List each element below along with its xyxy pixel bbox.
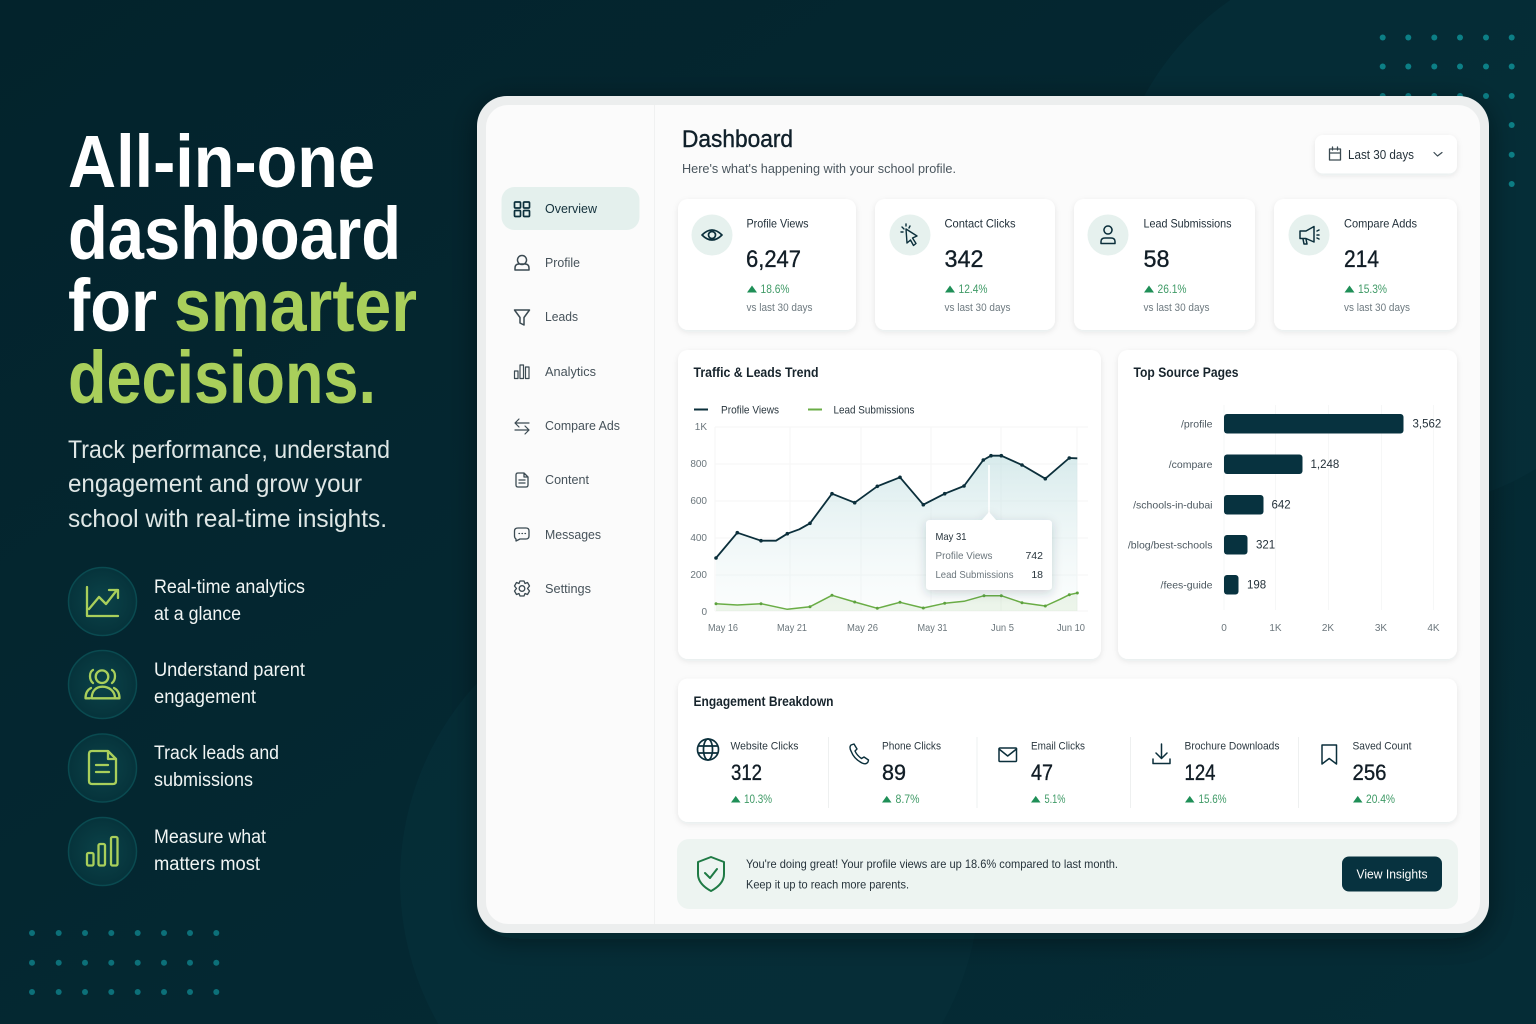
legend: Lead Submissions — [834, 404, 915, 416]
card: lead submissions: 26.1% — [1158, 284, 1186, 296]
card: compare adds: 214 — [1344, 246, 1379, 273]
bar: blog best schools — [1128, 535, 1275, 554]
feature: parent engagement: engagement — [154, 687, 257, 708]
y axis labels: 400 — [690, 533, 707, 544]
panel: top source pages: Top Source Pages — [1134, 365, 1238, 380]
nav: leads: Leads — [545, 309, 578, 324]
metric: website clicks: 10.3% — [744, 794, 772, 806]
metric: email clicks: Email Clicks — [1031, 740, 1085, 752]
card: contact clicks: Contact Clicks — [944, 216, 1016, 230]
metric: brochure downloads: 15.6% — [1198, 794, 1226, 806]
metric: website clicks: 312 — [731, 760, 762, 785]
icon: cursor click — [901, 224, 917, 246]
feature: parent engagement: Understand parent — [154, 660, 306, 681]
subtitle: Track performance, understand — [68, 436, 390, 464]
x axis labels: May 16 — [708, 623, 738, 634]
bar: blog best schools: 321 — [1256, 540, 1275, 552]
nav: compare ads: Compare Ads — [545, 418, 620, 433]
subtitle — [68, 436, 390, 533]
card: profile views: 6,247 — [746, 246, 801, 273]
metric: email clicks: 5.1% — [1044, 794, 1066, 806]
bar: schools in dubai: 642 — [1272, 500, 1291, 512]
y axis labels: 800 — [690, 459, 707, 470]
nav: settings — [514, 581, 591, 596]
heading: dashboard — [682, 126, 956, 176]
card: contact clicks: 12.4% — [958, 284, 988, 296]
nav: analytics — [514, 364, 596, 379]
panel: dashboard window — [477, 96, 1489, 933]
tooltip: Lead Submissions — [936, 569, 1014, 581]
legend: Profile Views — [721, 404, 779, 416]
x axis labels: Jun 5 — [991, 623, 1014, 634]
feature: track leads: Track leads and — [154, 743, 279, 764]
metric: email clicks — [999, 740, 1085, 806]
metric: saved count: 20.4% — [1366, 794, 1395, 806]
y axis labels: 600 — [690, 496, 707, 507]
icon: shield check — [698, 857, 724, 891]
card: lead submissions: Lead Submissions — [1144, 216, 1232, 230]
dot pattern: top right — [1380, 34, 1515, 187]
date selector — [1315, 135, 1457, 174]
x axis labels: 0 — [1221, 623, 1227, 634]
nav: profile: Profile — [545, 255, 580, 270]
bar: blog best schools: /blog/best-schools — [1128, 540, 1212, 552]
card: compare adds: vs last 30 days — [1344, 302, 1410, 314]
callout: doing great: Keep it up to reach more parents. — [746, 878, 909, 892]
bar: compare — [1169, 454, 1339, 474]
button: view insights — [1342, 856, 1442, 892]
metric: brochure downloads: Brochure Downloads — [1184, 740, 1280, 752]
nav: content: Content — [545, 472, 589, 487]
y axis labels: 0 — [701, 607, 707, 618]
bar: schools in dubai — [1133, 495, 1291, 514]
icon: line chart — [87, 587, 118, 616]
metric: phone clicks: Phone Clicks — [882, 740, 941, 752]
bar: fees guide: 198 — [1247, 580, 1266, 592]
subtitle: engagement and grow your — [68, 470, 362, 498]
card: contact clicks: 342 — [944, 246, 984, 273]
bar: profile — [1181, 414, 1441, 434]
x axis labels: 1K — [1269, 623, 1282, 634]
heading: dashboard: Dashboard — [682, 126, 793, 153]
callout: doing great: You're doing great! Your profile views are up 18.6% compared to last month. — [746, 857, 1118, 871]
nav: content — [516, 472, 589, 487]
bar: profile: /profile — [1181, 418, 1213, 430]
panel: traffic and leads trend: Traffic & Leads Trend — [694, 365, 818, 380]
title — [68, 120, 417, 419]
x axis labels: 3K — [1375, 623, 1387, 634]
button: view insights: View Insights — [1356, 868, 1428, 882]
dot pattern: bottom left — [29, 930, 219, 995]
nav: compare ads — [515, 418, 620, 434]
subtitle: school with real-time insights. — [68, 505, 387, 533]
feature: measure — [68, 818, 267, 886]
tooltip — [926, 465, 1052, 590]
icon: document — [89, 751, 116, 784]
feature: parent engagement — [68, 650, 306, 718]
metric: brochure downloads: 124 — [1184, 760, 1216, 785]
feature: track leads: submissions — [154, 770, 253, 791]
nav: overview (active): Overview — [545, 201, 598, 216]
card: profile views: Profile Views — [746, 216, 808, 230]
feature: real-time analytics: at a glance — [154, 604, 241, 625]
nav: analytics: Analytics — [545, 364, 596, 379]
icon: people — [86, 670, 120, 698]
feature: real-time analytics: Real-time analytics — [154, 577, 305, 598]
feature: track leads — [68, 734, 279, 802]
card: compare adds: Compare Adds — [1344, 216, 1417, 230]
metric: saved count — [1322, 740, 1412, 806]
card: lead submissions: vs last 30 days — [1144, 302, 1210, 314]
metric: phone clicks — [850, 740, 941, 806]
y axis labels: 200 — [690, 570, 707, 581]
x axis labels: May 26 — [847, 623, 878, 634]
metric: website clicks: Website Clicks — [730, 740, 799, 752]
icon: calendar — [1330, 147, 1340, 160]
panel: engagement breakdown — [678, 678, 1457, 822]
title: All-in-one — [68, 120, 375, 203]
date selector: Last 30 days — [1348, 148, 1414, 162]
x axis labels: Jun 10 — [1057, 623, 1085, 634]
title: decisions. — [68, 336, 376, 419]
metric: phone clicks: 89 — [882, 760, 906, 785]
nav: settings: Settings — [545, 581, 591, 596]
bar: fees guide: /fees-guide — [1161, 580, 1213, 592]
metric: website clicks — [698, 739, 799, 806]
card: lead submissions — [1074, 199, 1255, 330]
icon: bars — [87, 837, 118, 866]
x axis labels — [708, 623, 1085, 634]
icon: person — [1101, 226, 1115, 244]
icon: megaphone — [1300, 226, 1319, 244]
card: contact clicks — [875, 199, 1055, 330]
sidebar — [502, 187, 640, 596]
bar: fees guide — [1161, 575, 1266, 594]
card: compare adds: 15.3% — [1358, 284, 1387, 296]
bar: profile: 3,562 — [1412, 418, 1441, 430]
icon: chevron — [1434, 152, 1442, 156]
card: profile views — [678, 199, 856, 330]
nav: messages — [514, 527, 601, 542]
x axis labels — [1221, 623, 1440, 634]
bar: compare: 1,248 — [1310, 459, 1339, 471]
bar: schools in dubai: /schools-in-dubai — [1133, 500, 1212, 512]
nav: leads — [514, 309, 578, 325]
card: profile views: 18.6% — [760, 284, 790, 296]
y axis labels — [690, 422, 707, 618]
tooltip: 742 — [1025, 550, 1043, 562]
card: contact clicks: vs last 30 days — [944, 302, 1011, 314]
tooltip: 18 — [1031, 569, 1043, 581]
panel: engagement breakdown: Engagement Breakdown — [694, 694, 834, 709]
bar: compare: /compare — [1169, 459, 1213, 471]
nav: overview (active) — [502, 187, 640, 230]
metric: email clicks: 47 — [1031, 760, 1053, 785]
feature: real-time analytics — [68, 568, 305, 636]
title: smarter — [174, 264, 417, 347]
x axis labels: 4K — [1427, 623, 1440, 634]
panel: traffic and leads trend — [678, 350, 1101, 659]
callout: doing great — [677, 839, 1458, 909]
line chart — [690, 422, 1088, 634]
x axis labels: May 21 — [777, 623, 807, 634]
card: compare adds — [1274, 199, 1457, 330]
nav: profile — [515, 255, 580, 270]
y axis labels: 1K — [695, 422, 707, 433]
tooltip: Profile Views — [936, 550, 992, 562]
heading: dashboard: Here's what's happening with your school profile. — [682, 161, 956, 176]
legend — [694, 404, 915, 416]
feature: measure: Measure what — [154, 827, 267, 848]
metric: saved count: Saved Count — [1352, 740, 1412, 752]
metric: brochure downloads — [1153, 740, 1280, 806]
card: profile views: vs last 30 days — [746, 302, 813, 314]
x axis labels: 2K — [1322, 623, 1334, 634]
tooltip: May 31 — [936, 531, 967, 543]
nav: messages: Messages — [545, 527, 601, 542]
icon: eye — [702, 230, 722, 240]
title: dashboard — [68, 192, 401, 275]
metric: saved count: 256 — [1352, 760, 1386, 785]
feature: measure: matters most — [154, 854, 261, 875]
title: for — [68, 264, 157, 347]
card: lead submissions: 58 — [1144, 246, 1170, 273]
x axis labels: May 31 — [918, 623, 948, 634]
panel: top source pages — [1118, 350, 1457, 659]
bar chart — [1128, 405, 1441, 634]
metric: phone clicks: 8.7% — [896, 794, 920, 806]
